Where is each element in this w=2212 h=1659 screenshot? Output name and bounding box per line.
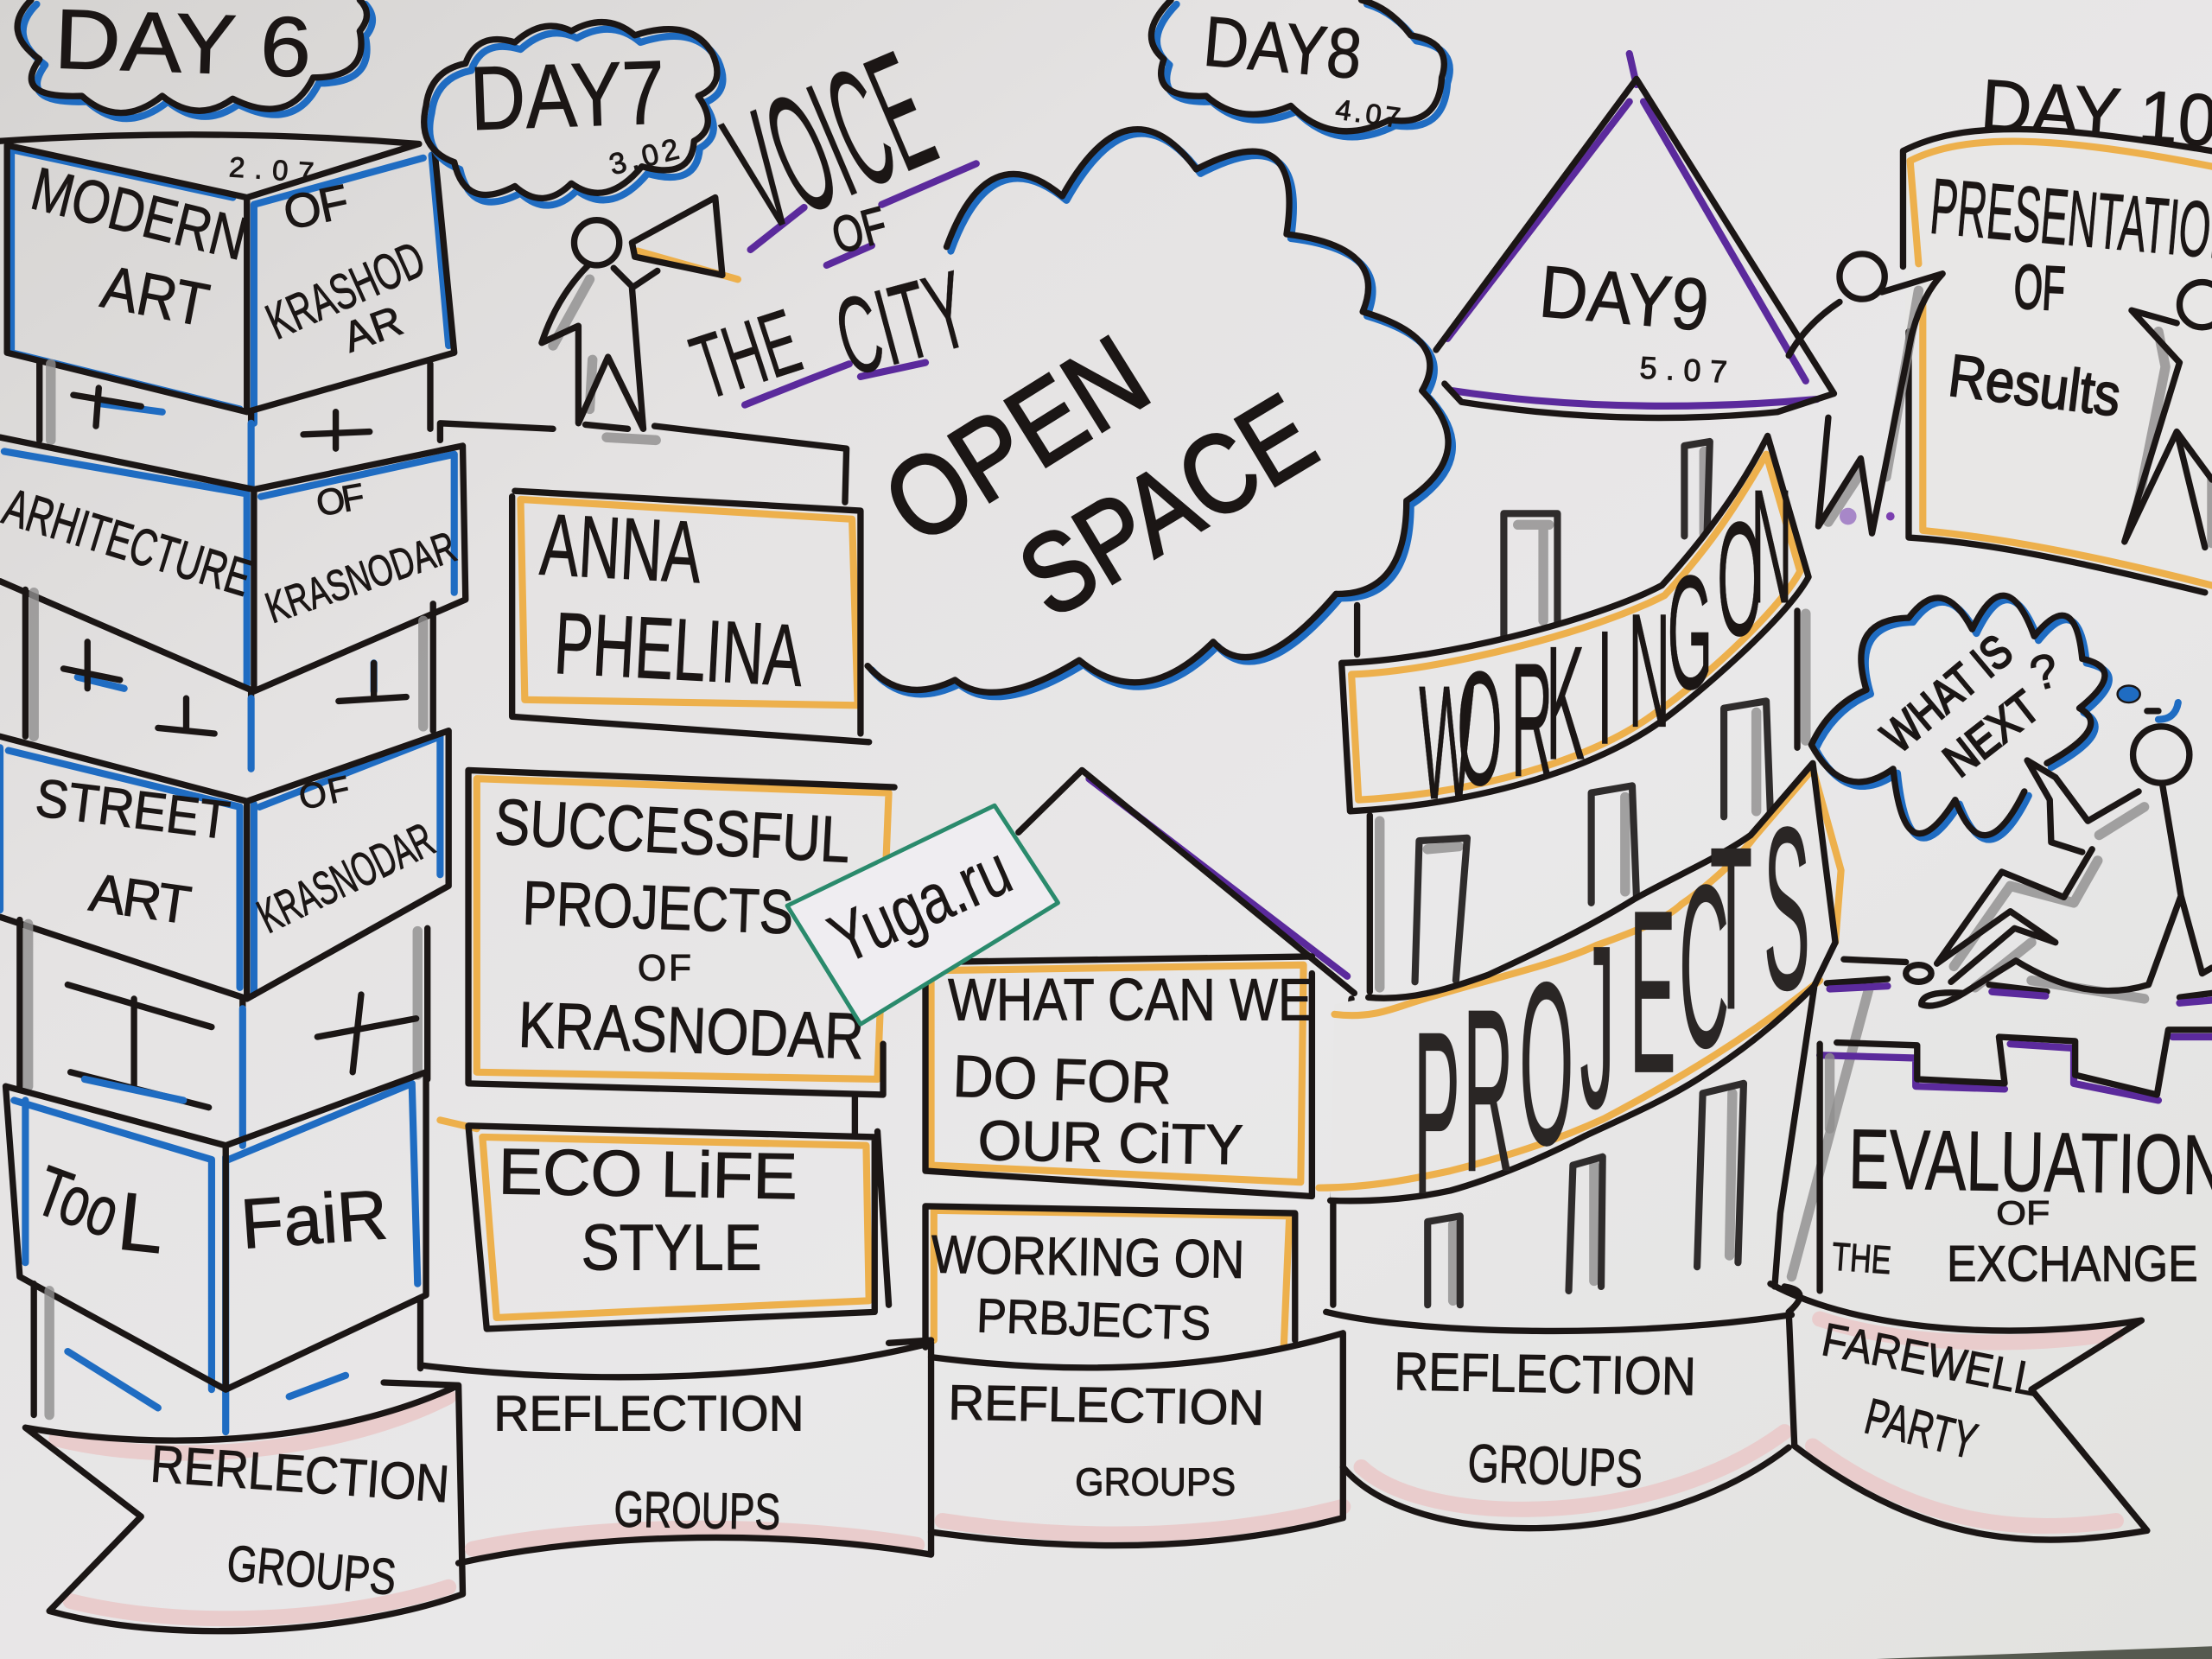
box: successful projects of Krasnodar: SUCCESSFUL bbox=[493, 785, 852, 876]
icon: thinking seated figure bbox=[1827, 727, 2212, 1006]
box: successful projects of Krasnodar: OF bbox=[638, 948, 691, 988]
text: evaluation of the exchange: OF bbox=[1996, 1195, 2050, 1232]
thought cloud: what is next: ? bbox=[2024, 643, 2064, 702]
cube: architecture of Krasnodar: KRASNODAR bbox=[259, 522, 462, 632]
title: voice of the city: CITY bbox=[823, 247, 981, 399]
roof: day 9: DAY9 bbox=[1536, 250, 1712, 346]
cloud: day 8: 4.07 bbox=[1334, 92, 1402, 134]
box: successful projects of Krasnodar: PROJECTS bbox=[522, 868, 795, 947]
ribbon: reflection groups 2: REFLECTION bbox=[493, 1387, 804, 1442]
house: what can we do for our city: WHAT CAN WE bbox=[948, 966, 1312, 1033]
ribbon: reflection groups 1 bbox=[25, 1382, 463, 1631]
cloud: day 6 bbox=[17, 0, 372, 118]
cloud: open space: SPACE bbox=[999, 370, 1336, 641]
ribbon: reflection groups 1: GROUPS bbox=[225, 1535, 398, 1606]
cube: architecture of Krasnodar: ARHITECTURE bbox=[0, 476, 258, 607]
cube: street art of Krasnodar: ART bbox=[86, 863, 194, 936]
banner: working on: WORKING ON bbox=[1419, 455, 1793, 833]
box: Anna Phelina: PHELINA bbox=[552, 594, 805, 705]
connector with height marks bbox=[25, 589, 433, 769]
connector with plus signs bbox=[40, 361, 430, 486]
house: what can we do for our city: OUR CiTY bbox=[977, 1109, 1243, 1176]
text: evaluation of the exchange bbox=[1830, 1111, 2212, 1292]
box: successful projects of Krasnodar: KRASNODAR bbox=[518, 988, 865, 1072]
ribbon: reflection groups 3: REFLECTION bbox=[948, 1375, 1265, 1436]
ribbon: farewell party bbox=[1770, 1284, 2147, 1540]
cube: modern art of Krasnodar bbox=[0, 135, 454, 423]
ribbon: reflection groups 3 bbox=[931, 1333, 1343, 1546]
thought cloud: what is next bbox=[1811, 595, 2178, 840]
icon: figure with megaphone bbox=[542, 198, 738, 440]
cube: architecture of Krasnodar bbox=[0, 437, 466, 691]
thought cloud: what is next: WHAT IS bbox=[1872, 625, 2022, 763]
cube: modern art of Krasnodar: OF bbox=[279, 175, 353, 240]
cube: modern art of Krasnodar: KRASHOD bbox=[258, 232, 433, 350]
cloud: open space: OPEN bbox=[863, 311, 1169, 568]
box: eco life style: STYLE bbox=[582, 1211, 762, 1283]
cube: modern art of Krasnodar: MODERN bbox=[25, 154, 254, 273]
roof: day 9: 5.07 bbox=[1639, 350, 1728, 390]
title: voice of the city: THE bbox=[680, 289, 812, 420]
cube: tool fair: L bbox=[114, 1175, 168, 1271]
cube: street art of Krasnodar: STREET bbox=[32, 768, 233, 851]
board: presentation of results: Results bbox=[1945, 342, 2124, 429]
cloud: day 7 bbox=[424, 22, 722, 206]
ribbon: reflection groups 4 bbox=[1326, 1312, 1791, 1529]
board: presentation of results bbox=[1903, 130, 2212, 593]
roof: day 9 bbox=[1436, 54, 1834, 418]
ribbon: reflection groups 2: GROUPS bbox=[613, 1482, 781, 1541]
box: working on projects: WORKING ON bbox=[931, 1225, 1245, 1290]
panel: bottom reflection ribbons bbox=[25, 1284, 2147, 1631]
title: voice of the city bbox=[680, 16, 981, 420]
cloud: day 7: 3.02 bbox=[606, 133, 683, 181]
box: working on projects: PRBJECTS bbox=[976, 1288, 1211, 1351]
cloud: open space bbox=[863, 130, 1452, 696]
cloud: day 7: DAY7 bbox=[468, 41, 666, 149]
box: working on projects bbox=[925, 1206, 1295, 1351]
box: Anna Phelina: ANNA bbox=[538, 496, 704, 601]
banner: projects: PROJECTS bbox=[1414, 779, 1810, 1243]
box: eco life style: ECO LiFE bbox=[498, 1135, 798, 1212]
text: evaluation of the exchange: THE bbox=[1830, 1234, 1892, 1282]
panel: day 9 tower bbox=[1319, 54, 1869, 1305]
icon: audience figure bbox=[2125, 283, 2212, 547]
tower walls and windows bbox=[1333, 442, 1869, 1305]
ribbon: reflection groups 1: RERLECTION bbox=[149, 1433, 451, 1513]
panel: day 6 column of cubes bbox=[0, 0, 466, 1432]
panel: day 8 open space and house bbox=[787, 0, 1452, 1351]
ribbon: farewell party: PARTY bbox=[1859, 1389, 1982, 1470]
thought cloud: what is next: NEXT bbox=[1934, 681, 2050, 787]
house: what can we do for our city bbox=[925, 770, 1354, 1196]
connector with tall marks bbox=[20, 919, 428, 1146]
cloud: day 8: DAY8 bbox=[1200, 2, 1365, 94]
cube: modern art of Krasnodar: 2.07 bbox=[228, 150, 315, 188]
cloud: day 8 bbox=[1151, 0, 1450, 137]
box: successful projects of Krasnodar bbox=[468, 770, 894, 1095]
cube: modern art of Krasnodar: ART bbox=[96, 251, 214, 340]
cube: street art of Krasnodar bbox=[0, 731, 448, 999]
ribbon: farewell party: FAREWELL bbox=[1818, 1313, 2043, 1406]
ribbon: reflection groups 2 bbox=[423, 1340, 931, 1563]
platform bbox=[440, 423, 847, 502]
title: voice of the city: OF bbox=[826, 197, 893, 264]
panel: day 7 voice of the city bbox=[424, 16, 981, 1329]
board: presentation of results: OF bbox=[2012, 252, 2067, 324]
cube: modern art of Krasnodar: AR bbox=[337, 297, 409, 361]
cube: tool fair bbox=[6, 1072, 426, 1432]
tag: Yuga.ru bbox=[787, 805, 1058, 1024]
cube: architecture of Krasnodar: OF bbox=[313, 475, 367, 524]
cube: street art of Krasnodar: OF bbox=[296, 768, 353, 817]
ribbon: reflection groups 4: REFLECTION bbox=[1394, 1342, 1696, 1407]
cube: tool fair: Too bbox=[26, 1151, 130, 1253]
tag: Yuga.ru: Yuga.ru bbox=[818, 830, 1023, 979]
panel: day 10 presentation, what next, evaluation bbox=[1789, 63, 2212, 1292]
icon: presenter figure bbox=[1789, 254, 1942, 533]
cube: street art of Krasnodar: KRASNODAR bbox=[249, 812, 442, 944]
house: what can we do for our city: DO FOR bbox=[952, 1043, 1173, 1116]
cube: tool fair: FaiR bbox=[238, 1175, 390, 1264]
ribbon: reflection groups 3: GROUPS bbox=[1075, 1460, 1236, 1504]
battlement roofline bbox=[1820, 1030, 2212, 1291]
box: Anna Phelina bbox=[512, 491, 869, 742]
ribbon: reflection groups 4: GROUPS bbox=[1466, 1433, 1643, 1499]
box: eco life style bbox=[440, 1097, 889, 1329]
